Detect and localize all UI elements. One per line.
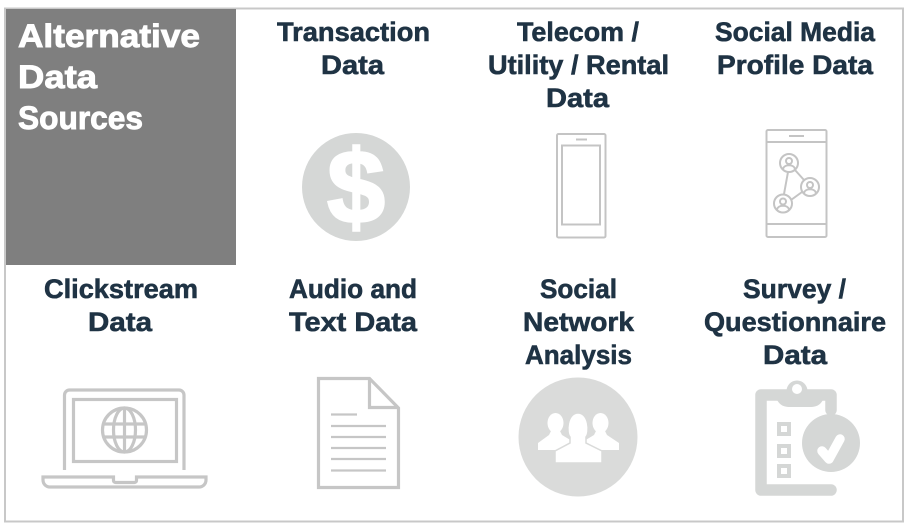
- panel: telecom data: [488, 17, 669, 238]
- heading: Alternative: [18, 18, 200, 54]
- heading: [44, 274, 198, 337]
- heading: Sources: [18, 100, 143, 136]
- panel: transaction data: [277, 17, 430, 246]
- icon: document: [318, 378, 398, 488]
- icon: dollar coin: [302, 130, 410, 246]
- heading: Data: [88, 307, 153, 337]
- icon: phone: [557, 134, 606, 238]
- icon: laptop with globe: [43, 390, 206, 487]
- panel: social network analysis: [518, 274, 638, 496]
- heading: [523, 274, 635, 370]
- heading: Utility / Rental: [488, 50, 669, 80]
- heading: [277, 17, 430, 80]
- heading: Text Data: [289, 307, 418, 337]
- panel: survey / questionnaire data: [704, 274, 886, 490]
- icon: dollar coin: $: [327, 130, 385, 246]
- heading: [18, 18, 200, 136]
- heading: Survey /: [743, 274, 846, 304]
- heading: Transaction: [277, 17, 430, 47]
- heading: Audio and: [289, 274, 417, 304]
- heading: Data: [546, 83, 610, 113]
- panel: title: [6, 9, 236, 265]
- heading: [488, 17, 669, 113]
- icon: phone with network: [766, 130, 826, 237]
- panel: clickstream data: [43, 274, 206, 487]
- heading: Data: [18, 59, 97, 95]
- heading: Analysis: [525, 340, 632, 370]
- icon: group of people: [518, 378, 638, 496]
- heading: Network: [523, 307, 635, 337]
- heading: Questionnaire: [704, 307, 886, 337]
- panel: audio and text data: [289, 274, 418, 488]
- heading: [704, 274, 886, 370]
- heading: Data: [321, 50, 385, 80]
- heading: Telecom /: [517, 17, 639, 47]
- panel: social media profile data: [715, 17, 876, 237]
- heading: Data: [763, 340, 828, 370]
- heading: Social Media: [715, 17, 876, 47]
- heading: Profile Data: [717, 50, 874, 80]
- heading: [715, 17, 876, 80]
- heading: [289, 274, 418, 337]
- heading: Social: [540, 274, 617, 304]
- icon: clipboard with check: [761, 380, 860, 490]
- heading: Clickstream: [44, 274, 198, 304]
